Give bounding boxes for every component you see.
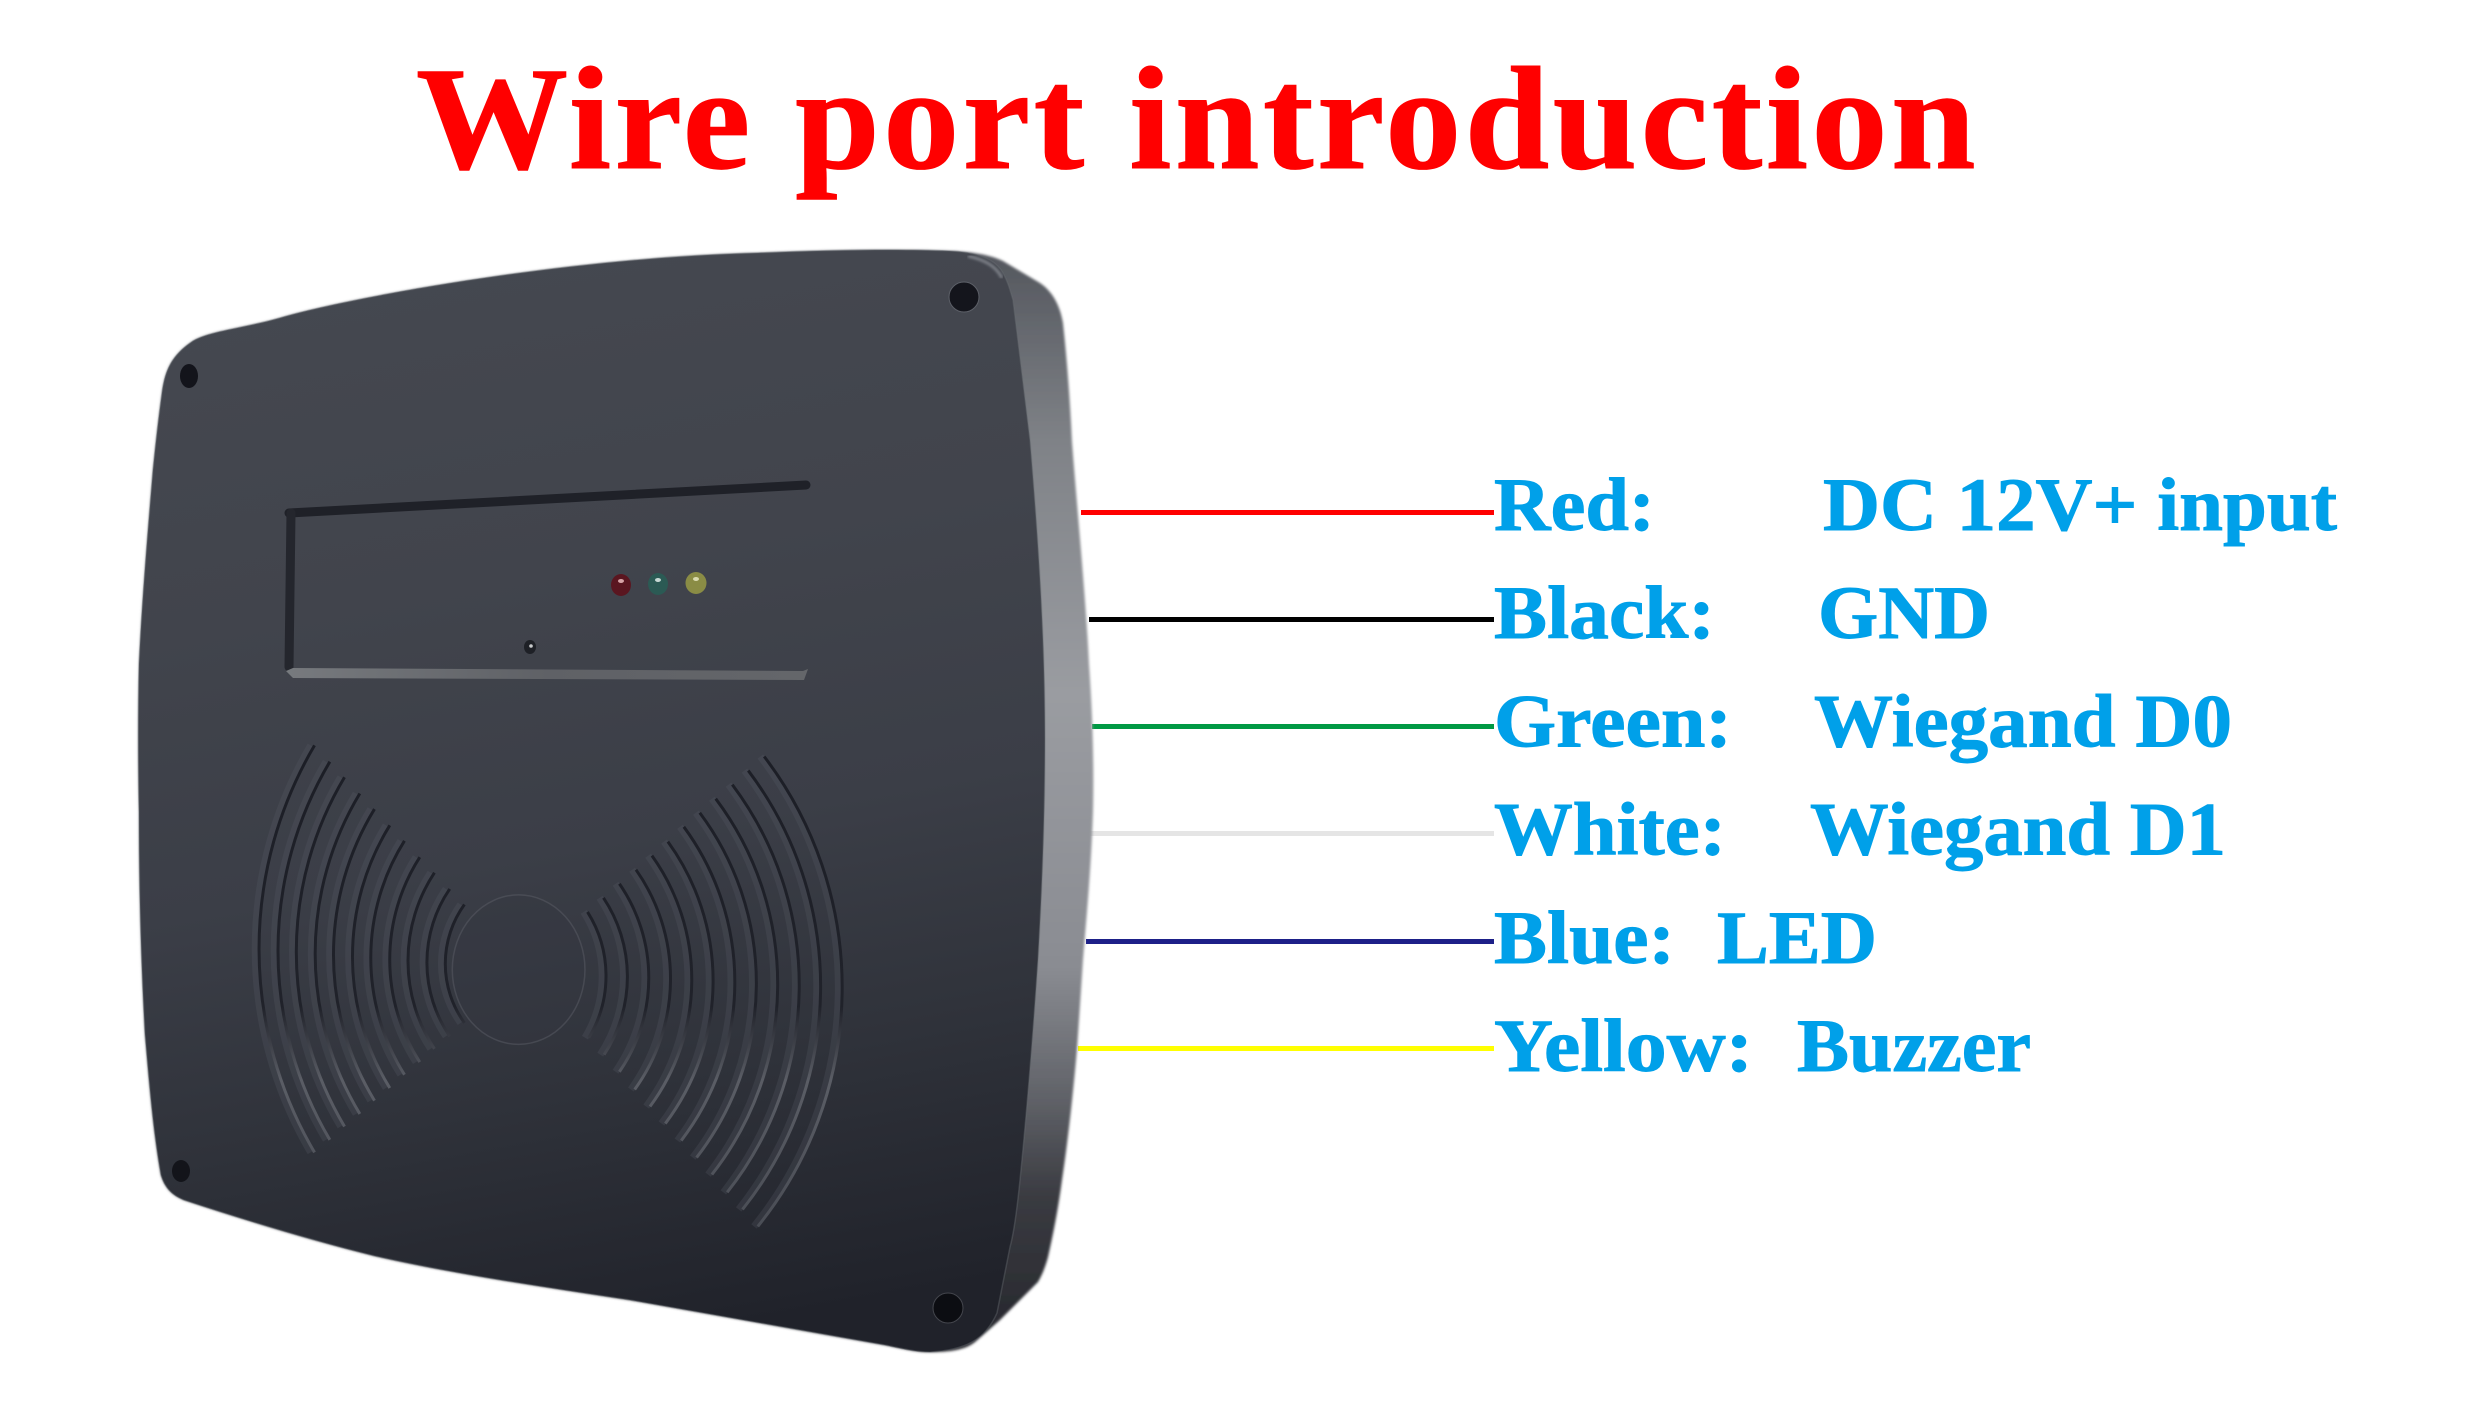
LED: red [611,574,631,596]
label: red wire: Red: [1494,464,1655,547]
screw hole: bottom left [172,1160,190,1182]
label: yellow wire: Yellow: [1494,1005,1753,1088]
wire: green [1092,724,1494,729]
device front face [138,250,1045,1352]
label: red wire: DC 12V+ input [1823,464,2337,547]
wire: white [1090,831,1494,836]
window bottom ledge [286,668,808,680]
label: black wire [1494,572,1990,655]
window left groove [289,513,291,667]
device side wall [138,250,1093,1352]
label: white wire: White: [1494,788,1726,872]
wire: red [1081,510,1494,515]
label: green wire [1494,680,2232,764]
LED: green [648,573,668,595]
label: yellow wire [1494,1005,2031,1088]
antenna wave emblem [255,745,842,1226]
screw hole: bottom right [933,1293,963,1323]
screw hole: top right [949,282,979,312]
label: green wire: Green: [1494,680,1732,764]
wire: black [1089,617,1494,622]
label: blue wire: LED [1717,897,1877,980]
right arcs [584,756,842,1226]
screw hole: top left [180,364,198,388]
label: red wire [1494,464,2337,547]
LED: yellow [686,572,706,594]
label: black wire: GND [1818,572,1990,655]
corner highlight [968,256,1002,278]
center circle [452,895,585,1044]
label: black wire: Black: [1494,572,1715,655]
window top groove [289,485,806,513]
reader device [138,250,1093,1352]
sensor pinhole [524,640,536,654]
indicator window [286,485,808,680]
label: white wire [1494,788,2226,872]
label: white wire: Wiegand D1 [1810,788,2226,872]
label: green wire: Wiegand D0 [1814,680,2232,764]
wire: blue [1086,939,1494,944]
title: Wire port introduction [416,37,1979,200]
label: blue wire [1494,897,1877,980]
wire: yellow [1078,1046,1494,1051]
label: blue wire: Blue: [1494,897,1675,980]
label: yellow wire: Buzzer [1797,1005,2031,1088]
left arcs [255,745,464,1152]
